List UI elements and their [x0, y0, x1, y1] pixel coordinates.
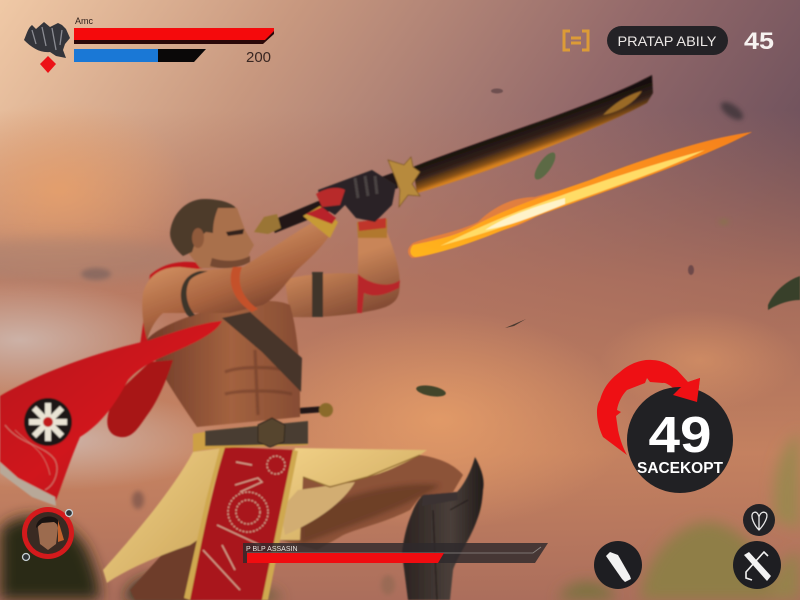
jaw shadow: [210, 256, 250, 268]
red cape with fringe: [0, 321, 222, 506]
figure: warrior: [0, 75, 653, 600]
ability pill: [607, 26, 728, 55]
button: crossed tools: [733, 541, 781, 589]
near arm: [142, 206, 338, 340]
arrow head overlay: [673, 378, 700, 402]
belt: [193, 418, 308, 452]
drifting leaves and debris: [81, 88, 800, 595]
blurred dark foliage, bottom left: [0, 516, 282, 600]
sword guard: [388, 157, 420, 207]
figure torso: [147, 301, 300, 427]
dagger at waist: [300, 403, 333, 417]
blurred trees, bottom right: [558, 432, 800, 600]
cape emblem: [24, 398, 72, 446]
sword blade: [413, 75, 653, 193]
health value: 200: [246, 49, 271, 66]
sword hilt and pommel: [254, 172, 398, 234]
top-right status HUD: [564, 26, 774, 55]
red circular arrow: [597, 360, 700, 455]
badge label: SACEKOPT: [637, 460, 723, 477]
button: tool: [594, 541, 642, 589]
player name: Amc: [75, 16, 94, 26]
embroidered red panel: [184, 447, 298, 600]
enemy name: P BLP ASSASIN: [246, 546, 298, 553]
bottom enemy bar: [243, 543, 548, 563]
blade ornament: [603, 91, 642, 115]
head: [170, 199, 254, 268]
flaming energy blade: [408, 132, 752, 258]
red cape strap at neck and back: [140, 262, 215, 345]
score badge: [597, 360, 733, 493]
health bar: [74, 28, 274, 44]
energy bar: [74, 49, 206, 62]
icon: orange bracket: [564, 31, 588, 50]
neck and face: [186, 203, 254, 268]
hair: [170, 199, 236, 256]
badge disc: [627, 387, 733, 493]
timer value: 45: [744, 28, 774, 55]
icon: red diamond: [40, 56, 56, 73]
brow: [226, 229, 244, 236]
ear: [192, 228, 204, 248]
cream skirt: [103, 447, 427, 583]
far arm: [285, 218, 400, 317]
small ring markers: [22, 510, 72, 560]
gloved hands on hilt: [316, 170, 396, 222]
portrait badge: [22, 507, 74, 560]
button: small heart: [743, 504, 775, 536]
icon: beast crest: [24, 22, 70, 58]
armored boot: [402, 457, 484, 600]
abdominal muscle shading: [225, 350, 292, 415]
top-left player HUD: [24, 16, 274, 73]
thigh and raised leg: [280, 455, 463, 550]
harness strap across chest: [222, 312, 302, 392]
rear leg: [130, 540, 200, 600]
badge number: 49: [648, 406, 712, 463]
ability pill: PRATAP ABILY: [618, 33, 717, 49]
